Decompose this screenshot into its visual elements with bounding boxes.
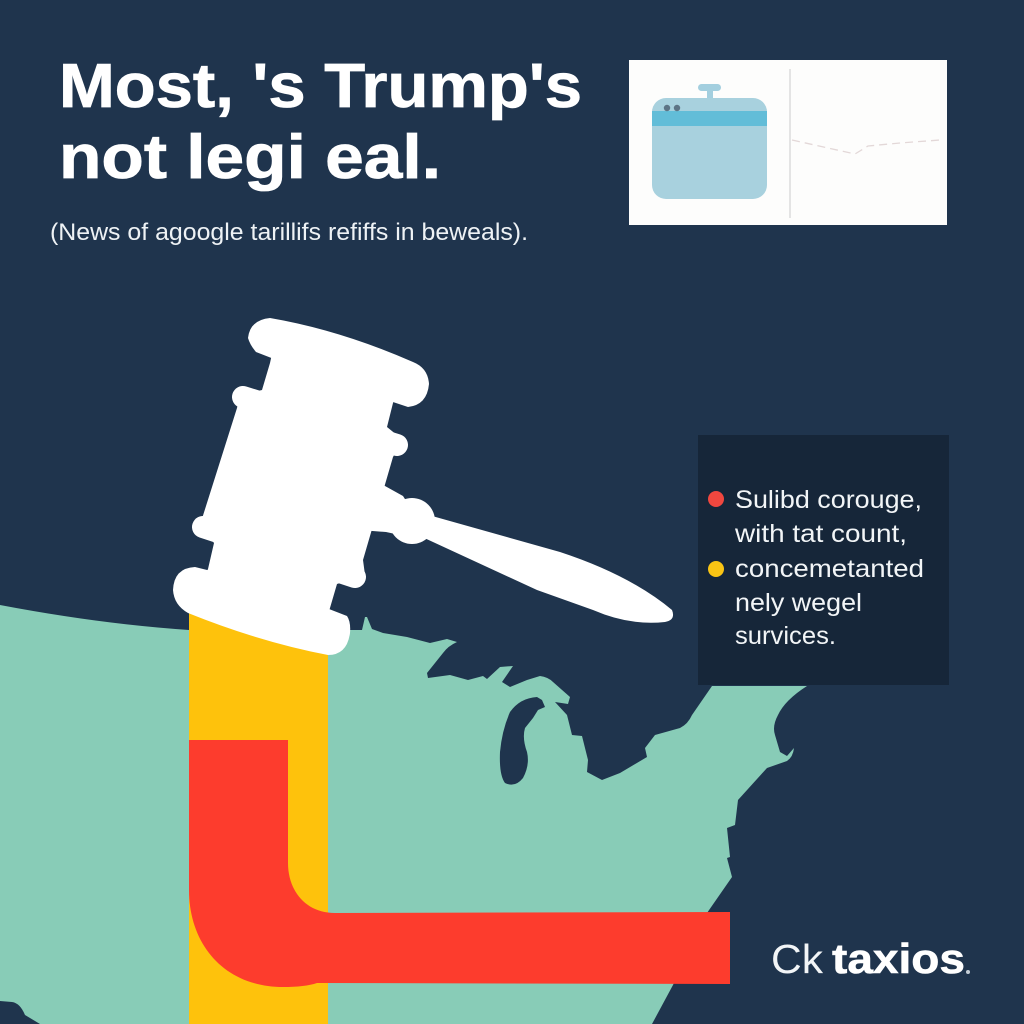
legend text: nely wegel	[735, 589, 862, 617]
legend text: survices.	[735, 622, 836, 650]
legend text: concemetanted	[735, 555, 924, 583]
map: United States silhouette	[0, 605, 807, 1024]
dashed line chart	[792, 140, 940, 154]
legend text: with tat count,	[734, 520, 907, 548]
subtitle: (News of agoogle tarillifs refiffs in beweals).	[50, 219, 528, 246]
icon: pot	[652, 84, 767, 199]
title: Most, 's Trump's	[59, 52, 582, 121]
title	[59, 52, 582, 192]
logo: taxios	[832, 935, 965, 982]
lake michigan	[500, 697, 545, 785]
panel: white card with pot icon and line	[629, 60, 947, 225]
logo	[771, 935, 970, 982]
legend marker yellow	[708, 561, 724, 577]
legend text	[734, 486, 924, 650]
legend text: Sulibd corouge,	[735, 486, 922, 514]
legend marker red	[708, 491, 724, 507]
red bent pipe	[189, 740, 730, 987]
title: not legi eal.	[59, 123, 441, 192]
logo: Ck	[771, 936, 824, 982]
icon: white gavel	[173, 318, 673, 655]
panel: legend box	[698, 435, 949, 685]
yellow vertical bar	[189, 605, 328, 1024]
